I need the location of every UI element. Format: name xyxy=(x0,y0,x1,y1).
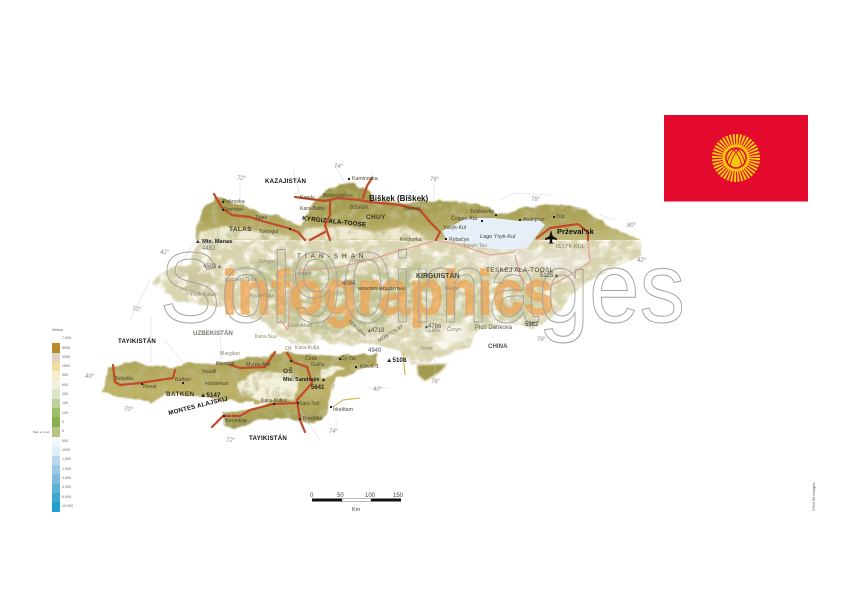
peaks: Mte. Sandrajie ▲ xyxy=(283,377,326,383)
town labels central: Naryn xyxy=(445,286,459,292)
town labels north: Yssyk-Kul xyxy=(443,225,466,231)
town labels southwest: Gulča xyxy=(311,362,325,368)
region and range labels: MONTES MOLDOTAU xyxy=(358,286,406,291)
scale segments xyxy=(312,498,401,502)
watermark: infographics: infographics xyxy=(222,259,554,328)
country labels: CHINA xyxy=(488,343,508,350)
country labels: TAYIKISTÁN xyxy=(249,435,287,442)
legend scale values: 500 xyxy=(62,439,68,443)
watermark: Sol90images outline: Sol90images xyxy=(160,232,685,344)
legend sea level note: Bajo el nivel xyxy=(33,430,50,434)
town labels north xyxy=(223,176,565,249)
town labels north: Kara-Balta xyxy=(300,206,325,212)
roads: main xyxy=(113,178,588,432)
elevation legend xyxy=(33,328,73,512)
town labels southwest: Sary-Taš xyxy=(299,401,320,407)
town labels southwest: Kara-Kulka xyxy=(261,398,287,404)
town labels north: Tešiktavka xyxy=(470,209,494,215)
town labels southwest: Vuadil xyxy=(202,369,216,375)
legend scale values: 0 xyxy=(62,429,64,433)
flag sun rays xyxy=(718,140,754,176)
graticule labels: 42° xyxy=(160,250,170,256)
scale unit: Km xyxy=(352,507,361,513)
town labels central: Ysyk-Bulak xyxy=(190,292,216,298)
peaks: 5982 xyxy=(525,322,539,328)
scale bar xyxy=(310,493,404,513)
town labels southwest: Seljukla xyxy=(115,376,133,382)
town labels central: Kyzyl-Tuu xyxy=(250,293,273,299)
town labels north: Tüp xyxy=(556,214,565,220)
region and range labels: KYRGIZ ALA-TOOSE xyxy=(302,215,367,229)
town labels north: BIŠKEK xyxy=(350,204,369,211)
terrain: southeast fragment xyxy=(417,364,447,381)
legend scale values: 600 xyxy=(62,383,68,387)
town labels central: Čaryn xyxy=(447,326,461,333)
region and range labels: BATKEN xyxy=(166,391,195,398)
town labels central: Pico Dankova xyxy=(475,325,513,331)
country labels xyxy=(118,178,508,442)
roads: secondary xyxy=(280,240,590,407)
peaks: ▲5147 xyxy=(200,392,221,399)
region and range labels: TALAS xyxy=(229,226,252,233)
terrain: southern shading xyxy=(103,353,377,428)
town labels southwest xyxy=(115,346,379,424)
city: Przevalsk: Prževal'sk xyxy=(557,227,595,236)
legend scale values: 3000 xyxy=(62,355,70,359)
icon: airport xyxy=(545,230,557,244)
graticule labels: 76° xyxy=(430,177,440,183)
city: Bishkek: Biškek (Biškek) xyxy=(369,194,428,203)
terrain: northern ranges xyxy=(195,182,641,240)
scale numbers: 150 xyxy=(393,493,404,499)
region and range labels: ISSYK-KUL xyxy=(556,244,585,250)
flag tunduk xyxy=(726,148,746,168)
town labels central: Jalal-Abad xyxy=(288,323,313,329)
flag sun disc xyxy=(722,144,750,172)
terrain: southern ranges xyxy=(103,353,377,428)
town labels north: Ozernoe xyxy=(223,207,243,213)
flag field xyxy=(664,115,808,202)
town labels north: Pokrovka xyxy=(223,199,245,205)
legend scale values: 3,000 xyxy=(62,476,71,480)
legend scale values: 4,000 xyxy=(62,485,71,489)
town labels central: Gjulča xyxy=(425,328,440,334)
legend scale values: 150 xyxy=(62,401,68,405)
peaks: 5125 ▴ xyxy=(540,273,558,279)
town labels southwest: Irkeštam xyxy=(333,407,353,413)
graticule labels: 78° xyxy=(537,337,547,343)
town labels central: Terek xyxy=(420,346,433,352)
flag of Kyrgyzstan xyxy=(664,115,808,202)
town labels north: Belovodskoe xyxy=(323,193,353,199)
graticule labels: 74° xyxy=(334,164,344,170)
region and range labels: MONTES ALAJSKIJ xyxy=(168,395,229,417)
region and range labels: OŠ xyxy=(283,366,293,375)
town labels north: Kandy xyxy=(300,195,315,201)
region and range labels: FERGANA xyxy=(347,319,368,338)
town labels central: Jumgal xyxy=(258,259,275,265)
town labels north: Yssyk-Tau xyxy=(463,243,487,249)
town labels north: Ananjevo xyxy=(523,217,545,223)
legend scale values xyxy=(62,336,73,508)
graticule labels: 42° xyxy=(637,258,647,264)
terrain: southern snow patches xyxy=(235,367,345,402)
country labels: UZBEKISTÁN xyxy=(193,330,233,337)
graticule labels: 72° xyxy=(226,438,236,444)
graticule ticks xyxy=(151,170,644,430)
town labels north: Rybačye xyxy=(449,237,469,243)
graticule labels: 70° xyxy=(132,307,142,313)
graticule labels: 40° xyxy=(373,387,383,393)
town labels north: Talas xyxy=(255,215,268,221)
terrain: central snow texture xyxy=(150,240,642,365)
town labels southwest: Batken xyxy=(175,377,191,383)
region and range labels: TESKEJ ALA-TOOSL xyxy=(486,267,554,274)
legend scale values: 300 xyxy=(62,392,68,396)
legend scale values: 10,000 xyxy=(62,504,73,508)
region and range labels: MONTES AT xyxy=(377,324,405,344)
legend scale values: 1,500 xyxy=(62,457,71,461)
region and range labels: TIAN-SHAN xyxy=(297,253,367,260)
region and range labels xyxy=(166,214,585,417)
terrain: central pale highlands xyxy=(150,240,642,365)
legend colour ramp xyxy=(52,343,60,512)
town labels southwest: Kuvasaj xyxy=(216,361,234,367)
town labels north: Kočkorka xyxy=(400,237,422,243)
peaks: 4503 ▴ xyxy=(203,264,221,270)
place labels xyxy=(85,164,647,444)
town labels north: Kaminovka xyxy=(352,176,378,182)
graticule labels: 70° xyxy=(124,407,134,413)
legend scale values: 5000 xyxy=(62,346,70,350)
region and range labels: CHUY xyxy=(366,214,386,221)
lake: Issyk-Kul xyxy=(442,218,545,250)
peaks: 4094 xyxy=(342,281,356,287)
graticule labels: 78° xyxy=(531,197,541,203)
town labels southwest: Kök-K-1 xyxy=(360,364,379,370)
peaks: 5641 xyxy=(311,385,325,391)
legend scale values: 100 xyxy=(62,411,68,415)
town labels southwest: Margilan xyxy=(220,351,240,357)
town labels southwest: Oš xyxy=(285,346,292,352)
town labels north: Čolpon-Ata xyxy=(451,215,477,222)
town labels southwest: Čirak xyxy=(305,355,318,362)
town labels central: Kara-Kulja xyxy=(295,345,319,351)
town labels southwest: Haidarkan xyxy=(205,381,229,387)
town labels southwest: Myrza-Ake xyxy=(246,362,271,368)
graticule labels: 76° xyxy=(431,379,441,385)
peaks: ▴4786 xyxy=(425,324,442,330)
legend scale values: 1500 xyxy=(62,364,70,368)
peaks: 4482 xyxy=(202,246,216,252)
peaks: ▲ Mte. Manas xyxy=(195,239,232,245)
town labels southwest: Revat xyxy=(143,384,157,390)
credit: ©Sol 90 Images xyxy=(811,482,816,511)
graticule labels: 72° xyxy=(237,176,247,182)
graticule labels xyxy=(85,164,647,444)
peaks: ▲5108 xyxy=(386,357,407,364)
town labels southwest: Bordöbö xyxy=(303,416,323,422)
rivers and borders xyxy=(130,165,615,440)
legend scale values: 2,000 xyxy=(62,467,71,471)
graticule labels: 80° xyxy=(627,223,637,229)
legend scale values: 1000 xyxy=(62,448,70,452)
town labels southwest: Čy-Tal xyxy=(341,355,356,362)
town labels central: Naryn xyxy=(352,258,366,264)
town labels southwest: Burunkija xyxy=(225,418,247,424)
scale numbers: 100 xyxy=(365,493,376,499)
city markers xyxy=(141,178,555,420)
peaks xyxy=(195,239,558,399)
country labels: KIRGUISTÁN xyxy=(416,271,460,280)
map: terrain of Kyrgyzstan xyxy=(103,165,644,440)
country labels: TAYIKISTÁN xyxy=(118,338,156,345)
legend scale values: 900 xyxy=(62,373,68,377)
peaks: 4940 xyxy=(368,348,382,354)
infographic canvas xyxy=(33,115,816,512)
legend title: Metros xyxy=(52,328,63,332)
country labels: KAZAJISTÁN xyxy=(265,178,307,185)
legend scale values: 0 xyxy=(62,420,64,424)
scale numbers xyxy=(310,493,404,499)
town labels north: Tokmak xyxy=(403,206,421,212)
town labels central: Ketmen-Tjube xyxy=(225,277,258,283)
town labels north: Toktogul xyxy=(259,229,278,235)
legend scale values: 6,000 xyxy=(62,495,71,499)
peaks: ▴4718 xyxy=(368,328,385,334)
town labels central xyxy=(190,258,513,352)
scale numbers: 0 xyxy=(310,493,314,499)
town labels central: Kara-Suu xyxy=(255,334,277,340)
graticule labels: 40° xyxy=(85,374,95,380)
town labels central: Toktogul xyxy=(292,271,311,277)
legend scale values: 7,000 xyxy=(62,336,71,340)
graticule labels: 74° xyxy=(329,429,339,435)
scale numbers: 50 xyxy=(337,493,344,499)
town labels north: Lago Ysyk-Kul xyxy=(480,234,516,240)
